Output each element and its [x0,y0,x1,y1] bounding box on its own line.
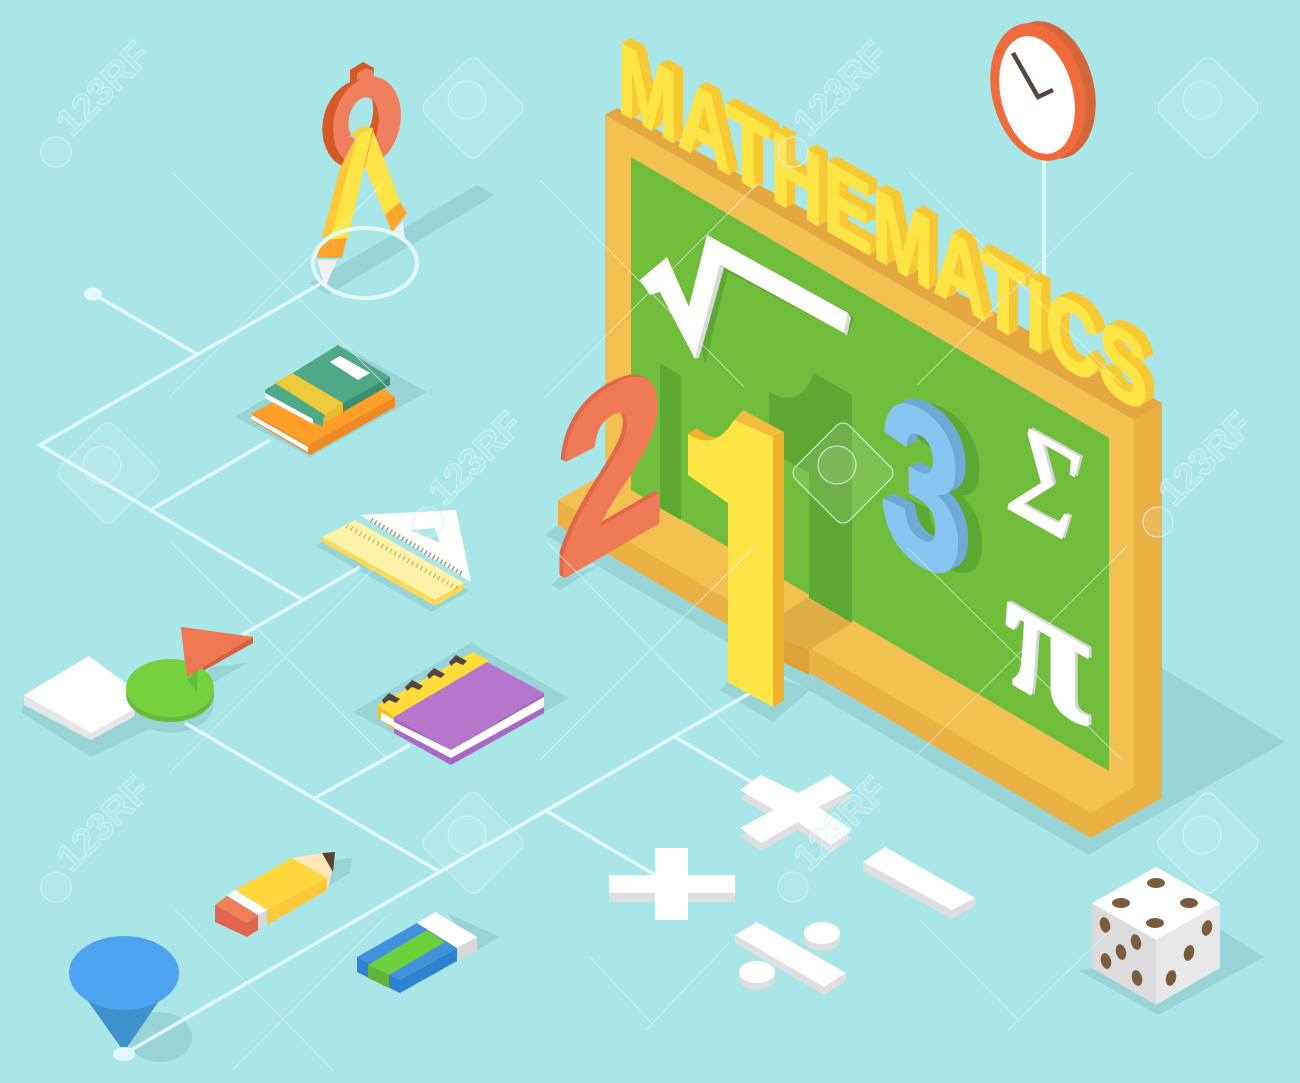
compass [313,62,410,288]
pi symbol: π [1008,526,1092,764]
numeral 3: 3 [886,338,968,631]
divide sign [735,922,846,995]
watermark logos: 123RF [786,769,896,879]
watermark logos: 123RF [421,404,531,514]
notebook [378,652,544,765]
title: MATHEMATICS: MATHEMATICS [617,19,1148,436]
ground shadows [22,185,1285,1062]
sigma symbol: Σ [997,399,1096,569]
blue cone [69,936,179,1061]
numeral 1: 1 [690,363,807,799]
green surface [631,157,1109,771]
triangle shape [181,627,253,680]
shadow of numeral 1 on ledge [784,598,852,650]
board top edge [605,108,1162,420]
square root symbol: √ [632,188,729,404]
compass ring [350,62,374,95]
numeral 3: 3 [882,340,964,633]
board ledge front [558,500,1091,838]
clock [976,11,1110,171]
square root symbol [640,235,854,364]
watermark logos [41,34,1262,902]
board ledge top [558,473,1134,813]
books [251,345,395,455]
green circle [126,659,214,722]
sigma symbol: Σ [1000,398,1099,568]
network lines [40,160,1044,1054]
plus sign [609,848,735,929]
board frame front [605,115,1134,790]
minus sign [863,847,975,919]
eraser [357,912,477,993]
board right side [1091,403,1162,838]
numeral 1 [688,410,784,707]
multiply sign [740,775,852,853]
numeral 2: 2 [557,308,663,627]
watermark crossing lines [170,172,1132,1070]
numeral 3: 3 [888,337,970,630]
title: MATHEMATICS: MATHEMATICS [626,14,1157,431]
ruler and set square [322,510,471,606]
title: MATHEMATICS: MATHEMATICS [622,16,1153,433]
title: MATHEMATICS: MATHEMATICS [618,18,1149,435]
title: MATHEMATICS: MATHEMATICS [624,15,1155,432]
pencil [215,852,335,937]
white square shape [24,656,135,740]
compass circle [313,228,417,298]
numeral 2: 2 [559,309,665,628]
title: MATHEMATICS: MATHEMATICS [620,17,1151,434]
dot: line start [84,288,102,300]
shadow of numeral 1 [769,373,852,623]
chalkboard [558,108,1162,838]
compass legs [322,133,358,240]
triangle front [181,627,253,677]
numeral 2: 2 [555,307,661,626]
watermark logos: 123RF [49,769,159,879]
watermark logos: 123RF [786,34,896,144]
numeral 3: 3 [880,341,962,634]
numeral 3: 3 [890,336,972,629]
numeral 3: 3 [884,339,966,632]
pi symbol: π [1005,527,1089,765]
shadow of numeral 2 [660,363,681,520]
watermark logos: 123RF [1151,404,1261,514]
dice [1092,867,1220,1005]
watermark logos: 123RF [49,34,159,144]
numeral 3: 3 [904,341,986,634]
